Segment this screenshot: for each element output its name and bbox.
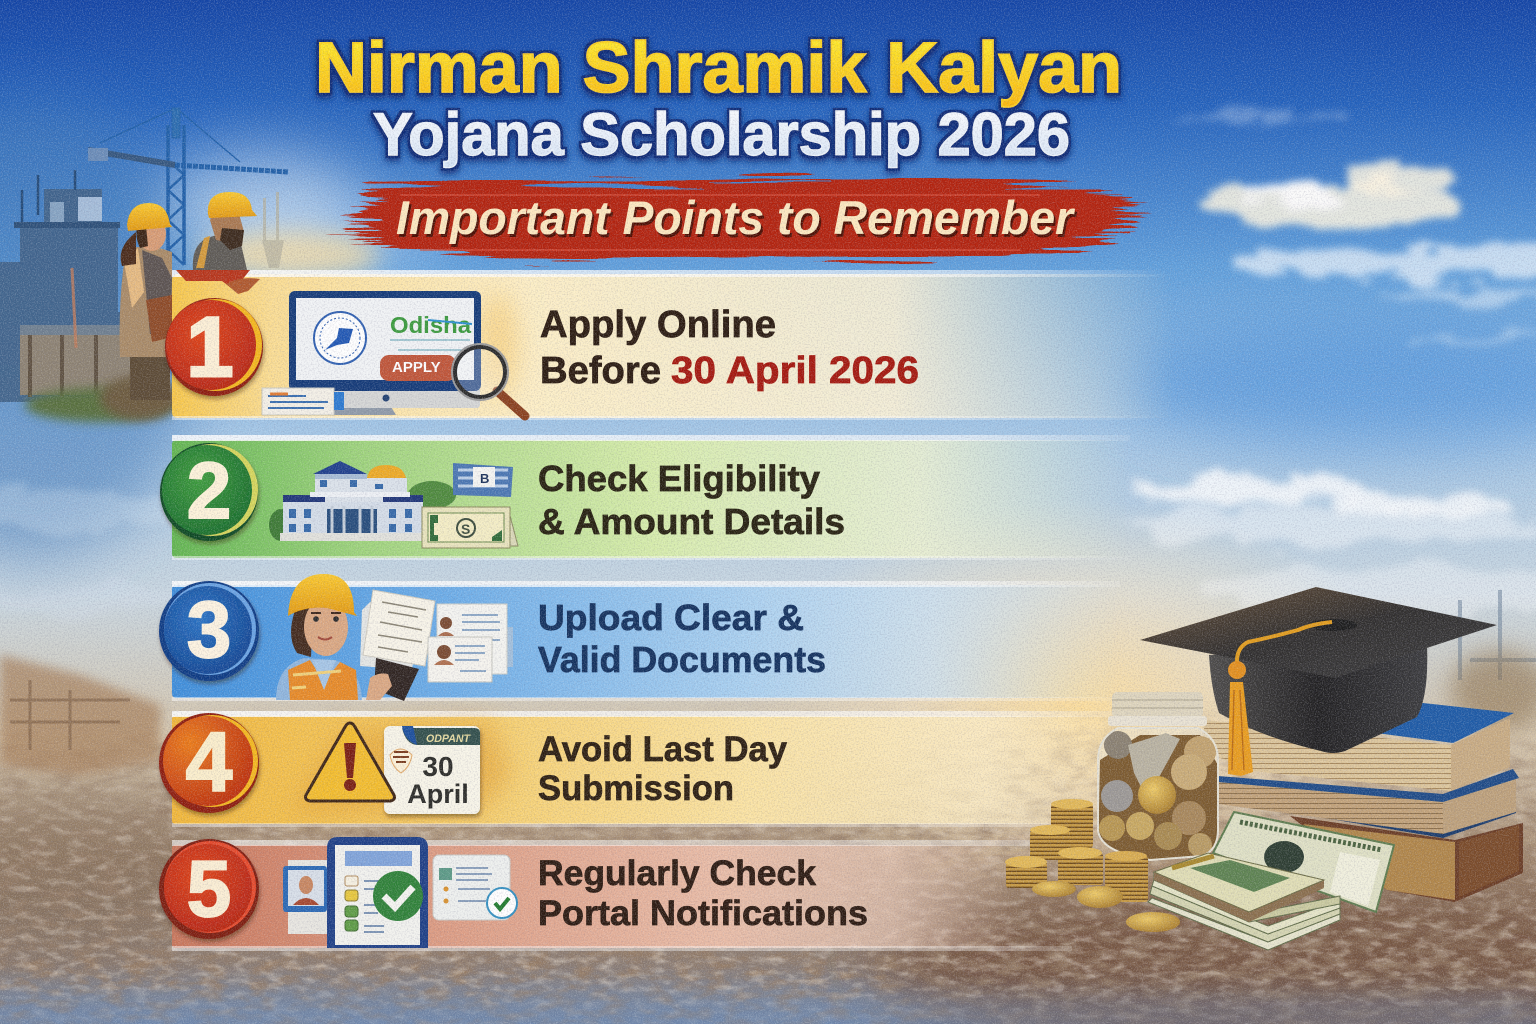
text: portal notifications: Portal Notifications <box>538 894 868 933</box>
panel 3: upload documents <box>172 574 1120 701</box>
sign board on panel <box>176 270 250 287</box>
number badge 2 <box>160 443 258 541</box>
red brush banner: Important Points to Remember <box>322 180 1157 259</box>
icon: right document with check <box>433 855 517 920</box>
text: portal notifications: Regularly Check <box>538 854 817 893</box>
panel 5: check portal notifications <box>172 837 1072 951</box>
workers at top of panel 1 <box>120 192 260 400</box>
panel 1: apply online <box>172 270 1175 420</box>
icon: small card <box>262 388 344 415</box>
text: apply online: 30 April 2026 <box>671 350 919 392</box>
banknotes stack <box>1148 812 1394 950</box>
worker: man with beard <box>193 192 257 270</box>
icon: magnifying glass <box>452 344 525 416</box>
icon: banknotes: S <box>461 521 470 537</box>
icon: calendar 30 April: April <box>407 779 469 809</box>
clouds <box>0 113 1536 614</box>
icon: booklet: B <box>480 471 489 486</box>
subtitle text: Important Points to Remember <box>396 191 1076 244</box>
text: avoid last day <box>538 730 788 808</box>
number badge 4: 4 <box>186 715 233 809</box>
text: avoid last day: Avoid Last Day <box>538 730 788 769</box>
number badge 4 <box>159 713 259 813</box>
panel 4: avoid last day <box>172 711 1130 827</box>
text: apply online: Before <box>540 350 661 392</box>
icon: worker with clipboard <box>276 574 419 701</box>
number badge 5 <box>159 839 259 939</box>
text: avoid last day: Submission <box>538 769 734 808</box>
icon: tablet checklist <box>327 837 428 948</box>
text: portal notifications <box>538 854 868 933</box>
icon: computer monitor with Odisha portal <box>289 291 481 415</box>
number badge 5: 5 <box>187 844 231 933</box>
text: check eligibility: & Amount Details <box>538 501 845 542</box>
title line 2: Yojana Scholarship 2026 <box>373 101 1070 168</box>
icon: calendar 30 April: ODPANT <box>426 733 471 745</box>
icon: booklet <box>453 463 513 497</box>
number badge 2: 2 <box>187 446 231 535</box>
number badge 1: 1 <box>187 300 233 394</box>
worker: woman with vest <box>120 203 172 400</box>
text: upload documents <box>538 597 826 680</box>
icon: banknotes <box>422 507 518 548</box>
text: check eligibility: Check Eligibility <box>538 458 820 499</box>
coin stacks <box>1005 799 1180 932</box>
text: upload documents: Valid Documents <box>538 639 826 680</box>
text: apply online <box>540 304 919 392</box>
icon: calendar 30 April: 30 <box>422 751 454 782</box>
background construction scene: crane and building <box>0 108 1536 775</box>
number badge 1 <box>165 298 263 396</box>
icon: warning triangle <box>306 723 394 801</box>
icon: profile card <box>283 860 332 934</box>
icon: documents <box>360 590 513 682</box>
graduation cap <box>1140 587 1497 776</box>
stacked books <box>1204 703 1523 902</box>
number badge 3 <box>159 581 259 681</box>
panel 2: eligibility and amount <box>172 435 1130 560</box>
text: upload documents: Upload Clear & <box>538 597 804 638</box>
coin jar <box>1098 692 1218 860</box>
icon: computer monitor with Odisha portal: Odisha <box>390 312 471 338</box>
title line 1: Nirman Shramik Kalyan <box>315 29 1122 108</box>
icon: government building <box>269 461 456 541</box>
text: apply online: Apply Online <box>540 304 776 346</box>
icon: computer monitor with Odisha portal: APPLY <box>392 359 441 376</box>
title <box>315 29 1122 168</box>
number badge 3: 3 <box>187 585 231 674</box>
text: check eligibility <box>538 458 845 542</box>
illustration: savings, books and graduation cap <box>1005 587 1523 950</box>
icon: calendar 30 April <box>384 726 480 814</box>
